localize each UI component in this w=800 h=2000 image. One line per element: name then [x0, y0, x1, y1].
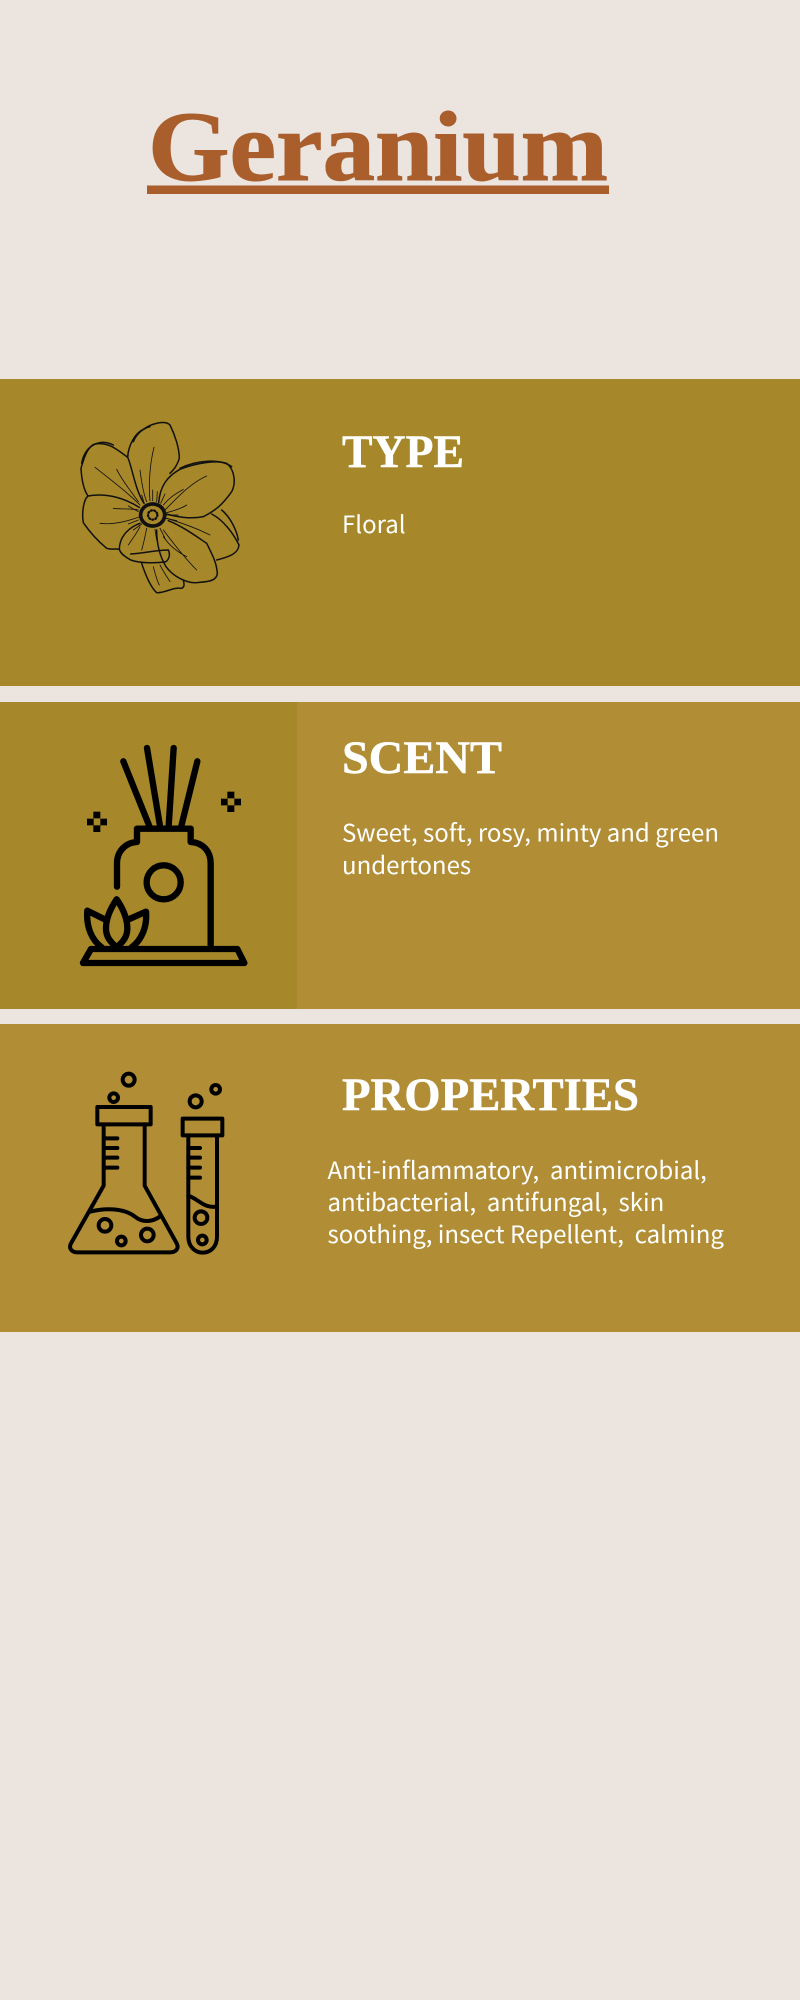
icon: flask and test tube	[70, 1074, 222, 1253]
text: type: Floral	[342, 505, 406, 540]
panel background: properties	[0, 1024, 800, 1332]
text: properties: antibacterial, antifungal, skin	[328, 1183, 664, 1218]
heading: scent: SCENT	[342, 732, 502, 784]
text: properties: Anti-inflammatory, antimicrobial,	[328, 1151, 707, 1186]
text: properties: soothing, insect Repellent, calming	[328, 1215, 724, 1250]
icon panel: scent	[0, 702, 297, 1009]
icon: flower	[81, 423, 239, 593]
text: scent: Sweet, soft, rosy, minty and green	[342, 814, 719, 848]
panel: properties	[0, 1024, 800, 1332]
panel: type	[0, 379, 800, 686]
title: Geranium	[148, 91, 608, 202]
heading: type: TYPE	[342, 426, 464, 478]
icon: reed diffuser	[83, 748, 244, 963]
text: scent: undertones	[342, 846, 471, 881]
panel background: scent	[0, 702, 800, 1009]
panel: scent	[0, 702, 800, 1009]
panel background: type	[0, 379, 800, 686]
heading: properties: PROPERTIES	[342, 1069, 639, 1121]
